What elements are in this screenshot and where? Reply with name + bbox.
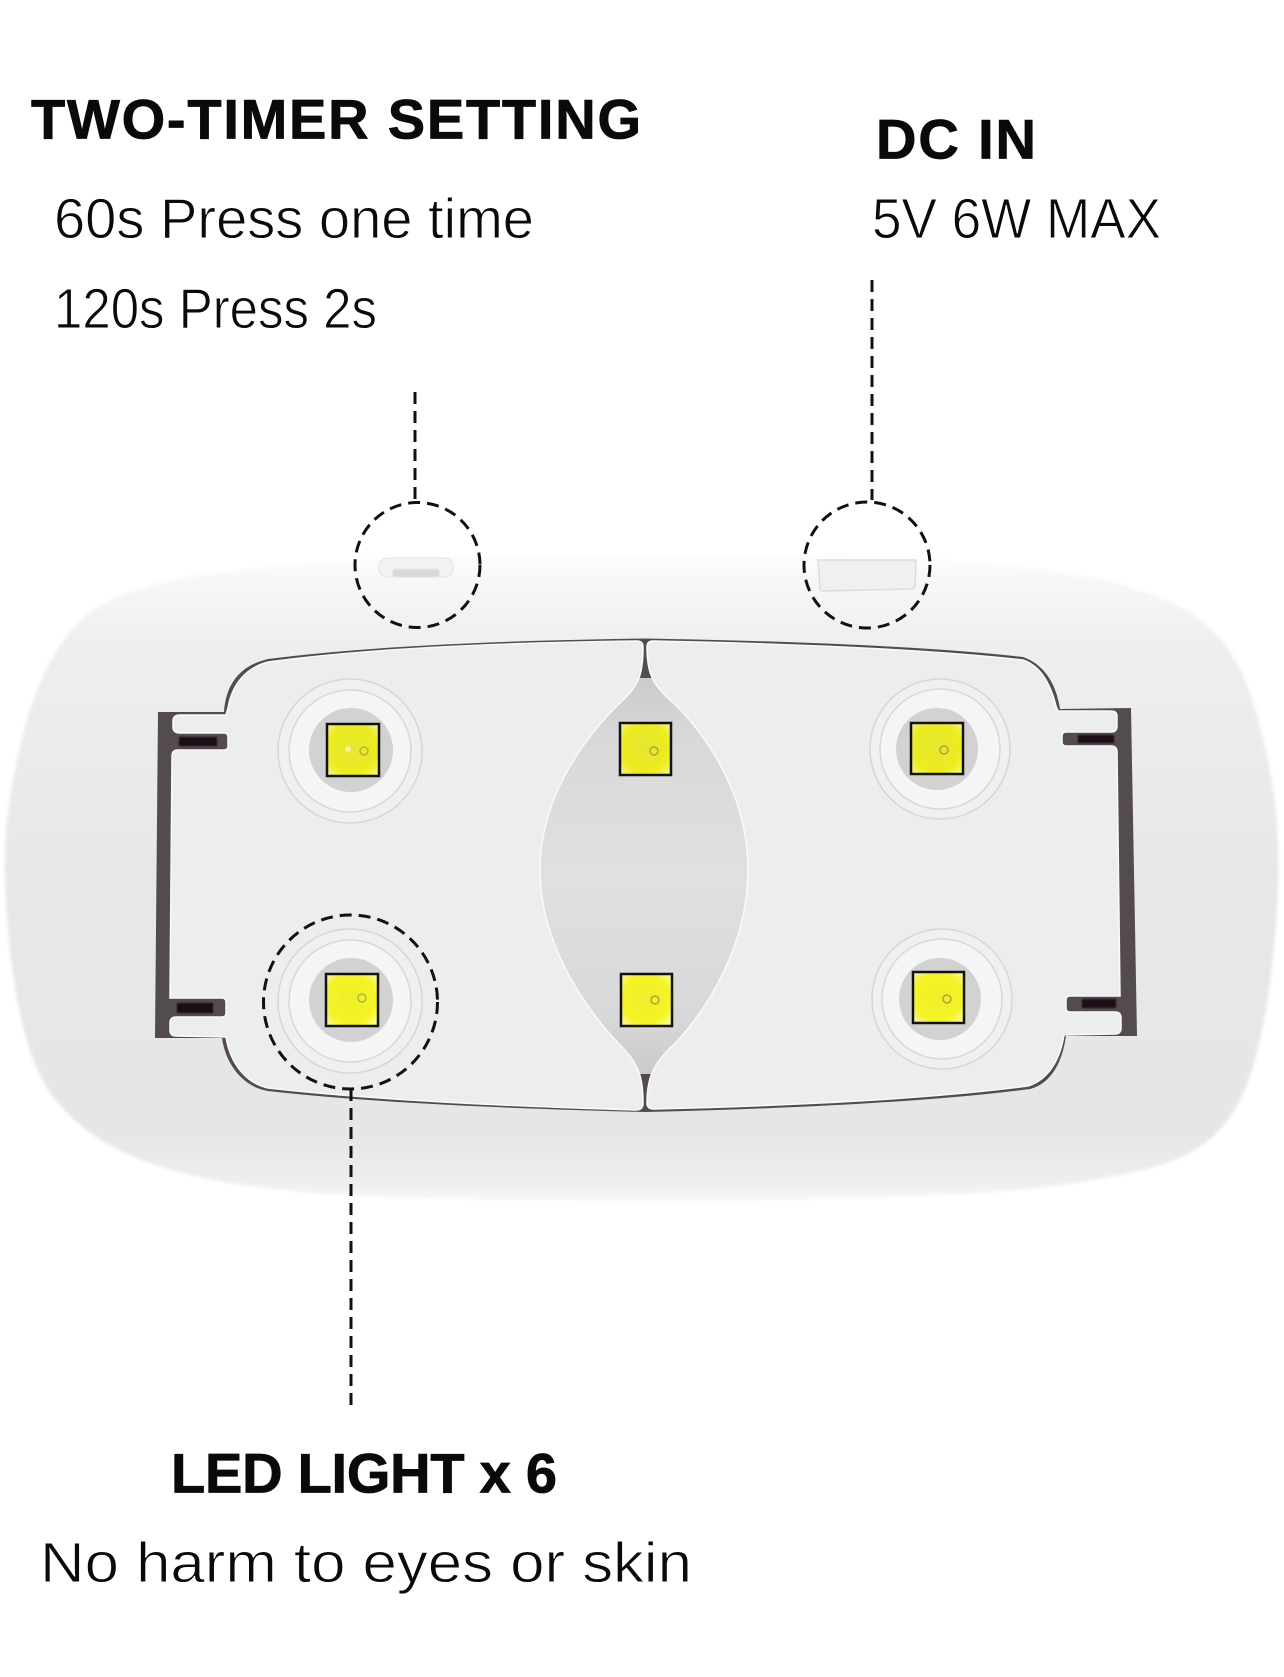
recess behind the doors: [155, 638, 1137, 1112]
LED: right bottom: [872, 929, 1012, 1069]
callout: LED dashed circle and leader: [264, 915, 438, 1412]
lamp body shell: [5, 554, 1278, 1201]
heading: DC in: DC IN: [876, 108, 1036, 170]
text block: two-timer setting: [31, 88, 641, 341]
callout: DC dashed circle and leader: [804, 280, 930, 628]
door latch slots: [177, 735, 1116, 1013]
text: voltage: 5V 6W MAX: [872, 187, 1161, 251]
LED: right top: [870, 679, 1010, 819]
central recess: eye shape: [530, 678, 760, 1074]
LED: centre top: [620, 723, 671, 775]
callout: timer dashed circle and leader: [355, 392, 480, 628]
heading: two-timer: TWO-TIMER SETTING: [31, 88, 641, 150]
text: no harm: No harm to eyes or skin: [40, 1531, 692, 1595]
left door: [170, 641, 643, 1110]
LED: left bottom: [278, 929, 422, 1073]
right door: [647, 641, 1121, 1109]
LED: left top: [278, 679, 422, 823]
nail lamp product: [5, 554, 1278, 1201]
text block: LED light: [40, 1442, 692, 1595]
text: 60s: 60s Press one time: [54, 187, 534, 251]
timer button: [379, 558, 453, 577]
heading: LED light: LED LIGHT x 6: [171, 1442, 557, 1504]
text: 120s: 120s Press 2s: [54, 277, 377, 341]
LED: centre bottom: [621, 974, 672, 1026]
text block: DC in: [872, 108, 1161, 251]
DC power port: [818, 560, 916, 591]
